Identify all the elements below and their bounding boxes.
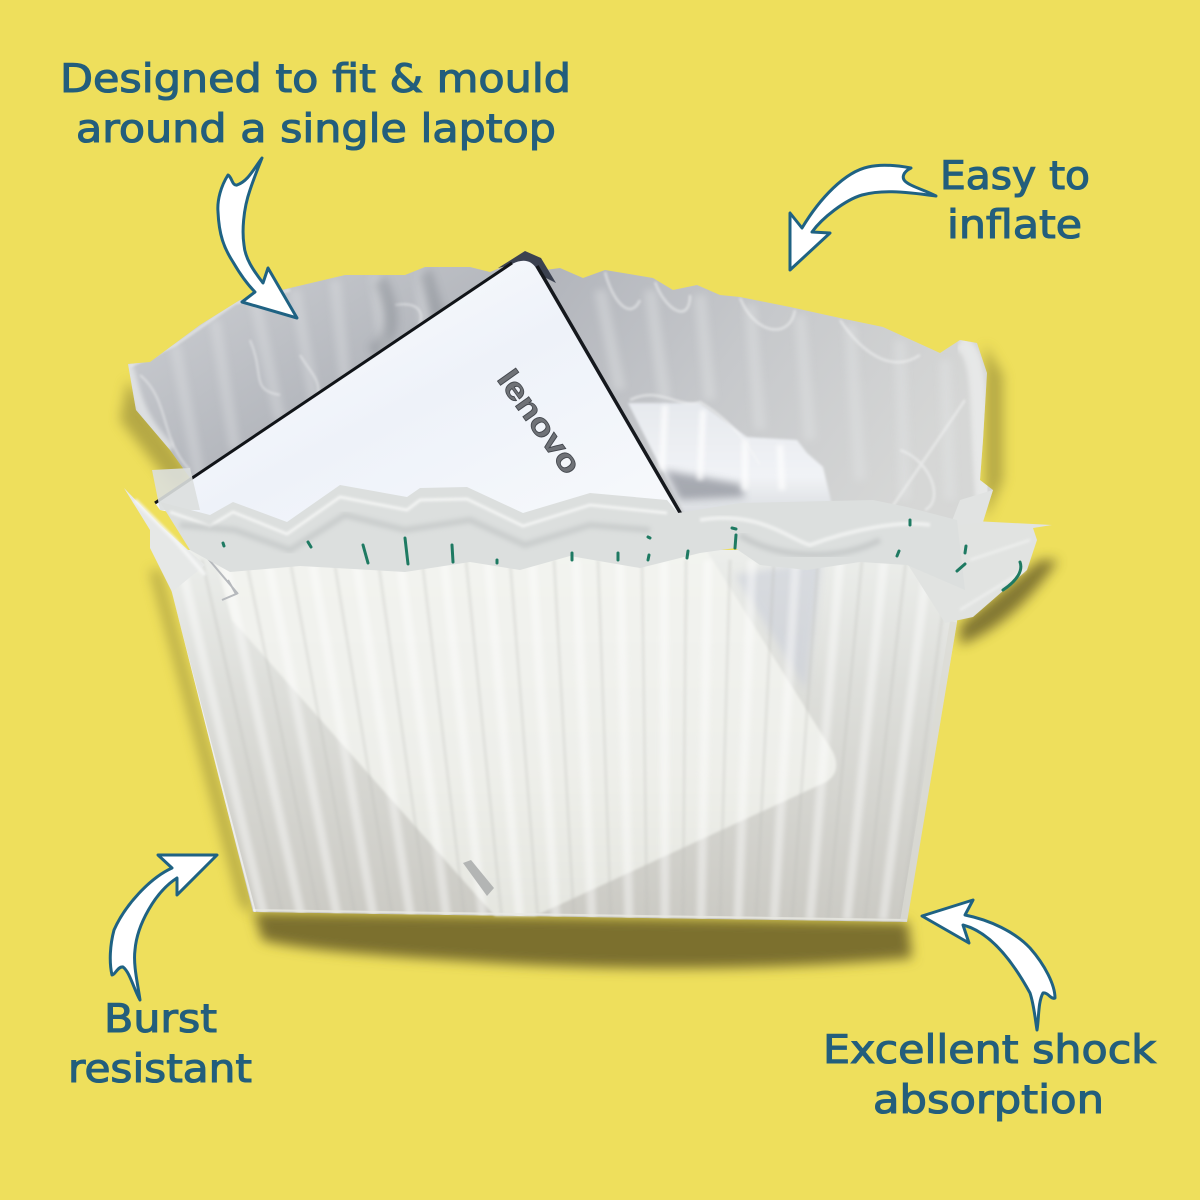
- callout text: designed to fit: Designed to fit & mould: [60, 57, 571, 102]
- right flap: [905, 520, 1052, 623]
- inside of the far wall: [628, 402, 831, 512]
- bag back wall, right: [530, 262, 993, 525]
- arrow: to laptop rim: [218, 158, 297, 318]
- laptop bezel corner: [498, 251, 556, 283]
- callout text: burst resistant: resistant: [68, 1047, 252, 1092]
- laptop lid: [155, 261, 683, 540]
- arrow: to bag side: [110, 855, 217, 1000]
- callout text: designed to fit: around a single laptop: [76, 107, 556, 152]
- rule mark through film: [463, 860, 494, 896]
- bag front body: [165, 540, 957, 922]
- laptop: [155, 251, 683, 540]
- arrow: to bag corner: [922, 900, 1055, 1030]
- laptop logo: lenovo: [490, 363, 588, 481]
- callout text: designed to fit: [60, 57, 571, 152]
- callout text: easy to inflate: Easy to: [940, 154, 1090, 199]
- callout text: shock absorption: absorption: [873, 1078, 1104, 1123]
- callout text: easy to inflate: [940, 154, 1090, 248]
- callout text: burst resistant: Burst: [104, 997, 217, 1042]
- left flap: [124, 488, 205, 592]
- callout text: burst resistant: [68, 997, 252, 1092]
- callout text: shock absorption: [823, 1028, 1156, 1123]
- laptop seen through the bag: [215, 540, 836, 916]
- wavy lip: [160, 485, 965, 590]
- callout text: easy to inflate: inflate: [947, 203, 1082, 248]
- callout text: shock absorption: Excellent shock: [823, 1028, 1156, 1073]
- bag drop shadows: [120, 345, 1058, 968]
- arrow: to back rim: [790, 165, 936, 270]
- green inflation valves: [223, 520, 1021, 590]
- bag back wall, left: [128, 266, 504, 478]
- bag front rim: [124, 468, 1052, 623]
